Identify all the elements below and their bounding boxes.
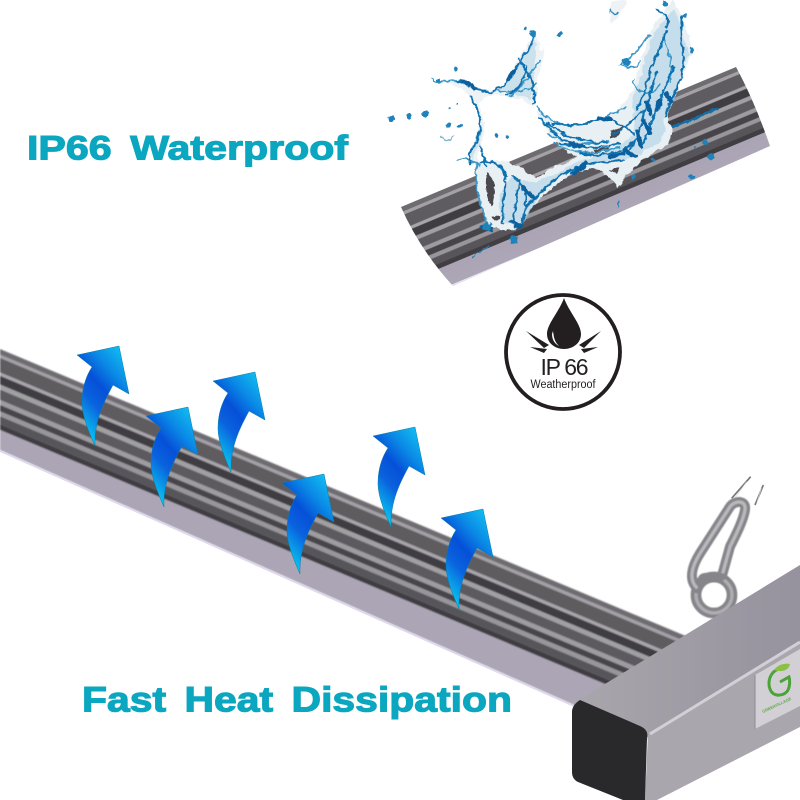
badge text IP 66: IP 66: [540, 354, 588, 380]
arrow 5: [373, 427, 425, 527]
heading: IP66 Waterproof: IP66 Waterproof: [27, 130, 349, 168]
fixture end: housing and end cap: [572, 565, 800, 800]
droplets: [389, 1, 714, 244]
arrow 1: [77, 346, 129, 446]
logo mark: GREENVILLAGE: [761, 696, 792, 714]
long heat-sink bar: [0, 349, 700, 763]
pale blue tint on the right arm: [499, 10, 688, 225]
splash light blue outline strands: [432, 33, 671, 224]
heading: Fast Heat Dissipation: Fast Heat Dissipation: [82, 680, 512, 720]
splash deep blue blotches: [463, 72, 671, 230]
arrow 6: [441, 509, 493, 609]
housing edge highlight: [650, 642, 800, 734]
arrow 3: [213, 372, 265, 472]
logo panel: [755, 649, 800, 729]
icon: water drop: [547, 298, 581, 349]
splash white body: band and right arm: [477, 0, 692, 230]
lower strands: [473, 202, 618, 257]
housing side face: [645, 643, 800, 800]
water splash: [389, 0, 717, 257]
arrow 4: [282, 474, 334, 574]
carabiner and hanging ring: [692, 477, 763, 613]
arrow 2: [146, 407, 198, 507]
black end cap: [572, 700, 647, 800]
splash wedges: [526, 331, 601, 353]
pale blue tint on the left arm: [470, 37, 535, 163]
upper heat-sink section: [390, 60, 780, 290]
heat arrows: [77, 346, 493, 609]
splash white body: left arm: [432, 30, 545, 167]
splash blue veins: [457, 10, 683, 227]
badge ring: [506, 295, 620, 409]
bar showing through the water: [486, 126, 624, 221]
badge: IP66 weatherproof: [506, 295, 620, 409]
badge text Weatherproof: Weatherproof: [530, 379, 596, 391]
housing top face: [573, 565, 800, 733]
drop highlight: [552, 331, 559, 346]
strand on right of bar: [672, 108, 717, 127]
